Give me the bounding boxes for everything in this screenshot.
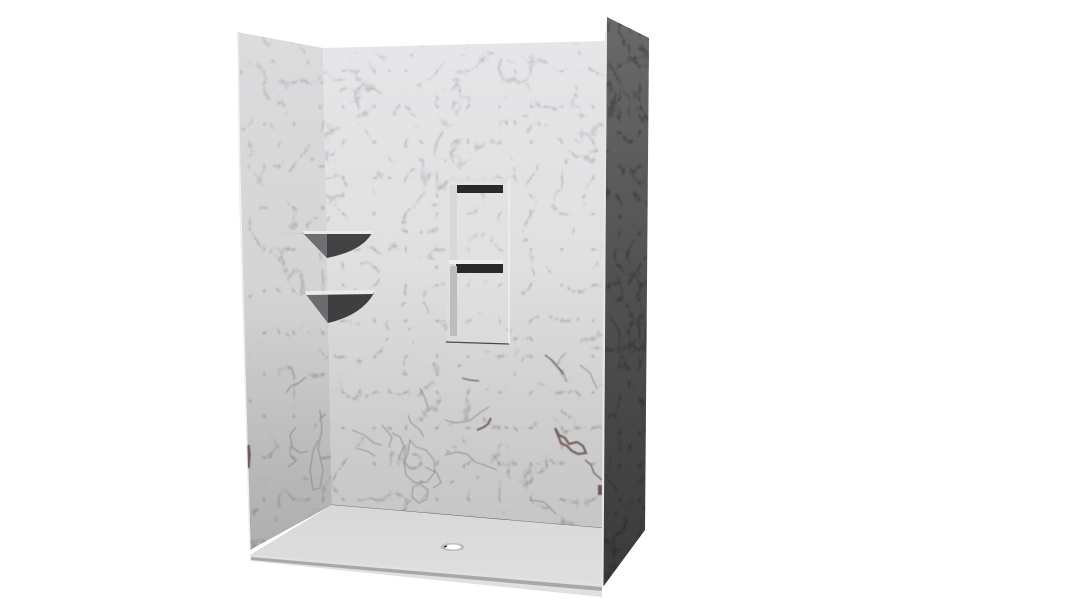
niche shelf ledge	[449, 260, 503, 264]
corner shelf: upper	[280, 231, 373, 258]
panel: shower tray	[250, 505, 602, 597]
niche: recessed double shelf	[446, 180, 509, 344]
panel: right wall	[602, 17, 650, 589]
niche bottom edge	[446, 342, 509, 344]
illustration: shower enclosure	[237, 17, 649, 597]
panel: back wall	[323, 41, 606, 531]
white wall edge	[602, 17, 607, 587]
corner shelf: lower	[305, 290, 374, 323]
drain	[440, 543, 464, 551]
niche side strips	[450, 185, 457, 336]
niche lower slot	[456, 264, 503, 273]
niche upper slot	[456, 185, 503, 193]
panel: left wall	[237, 32, 333, 552]
